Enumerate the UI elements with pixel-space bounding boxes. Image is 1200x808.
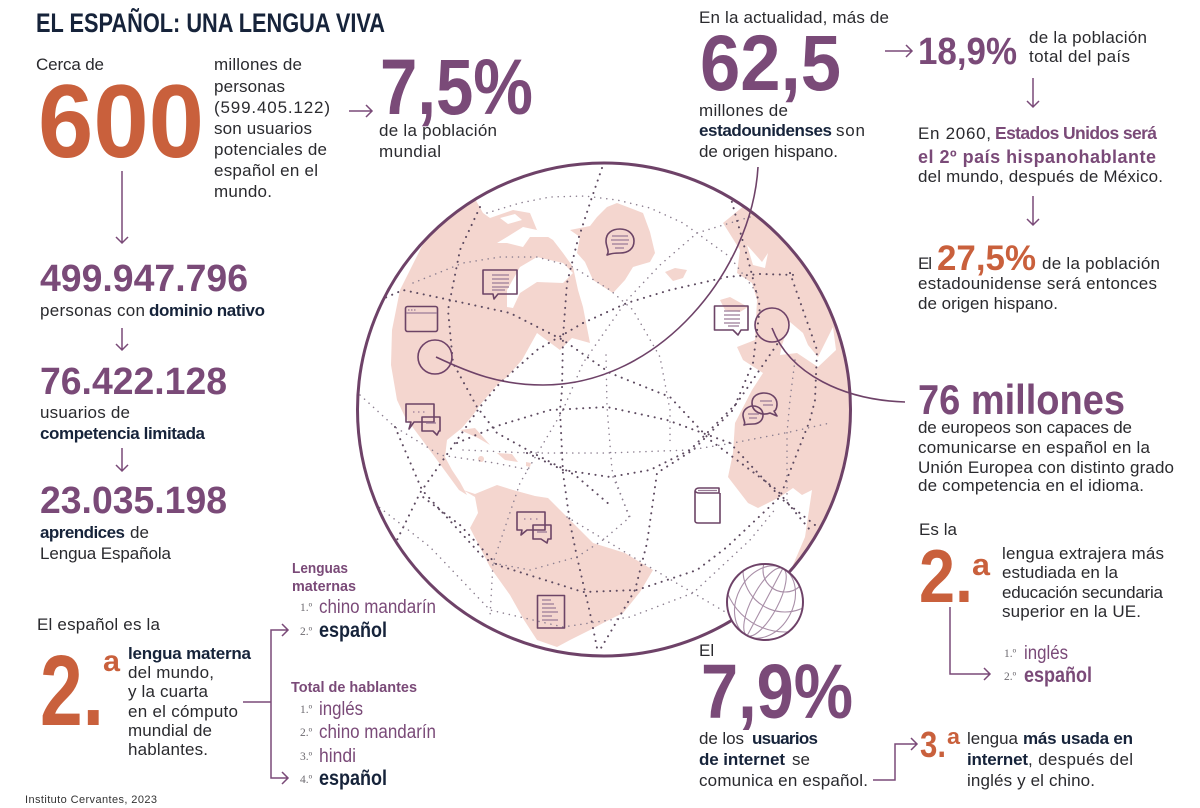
ranking: total speakers: 1.º xyxy=(300,704,313,716)
ranking: total speakers: chino mandarín xyxy=(319,722,436,743)
arc to Europe xyxy=(755,308,905,402)
stat: learners: de xyxy=(130,523,149,542)
stat: 27,5%: 27,5% xyxy=(937,239,1036,278)
stat: 27,5%: El xyxy=(918,254,932,273)
title: EL ESPAÑOL: UNA LENGUA VIVA xyxy=(36,7,385,38)
stat: third language on the internet: más usada en xyxy=(1023,729,1133,748)
arc to United States xyxy=(418,167,758,385)
stat: second mother tongue: y la cuarta xyxy=(128,682,209,701)
stat: 76 million Europeans: comunicarse en español en la xyxy=(918,438,1151,457)
stat: 62,5 million US hispanics: son xyxy=(836,121,865,140)
ranking: foreign languages: inglés xyxy=(1024,643,1068,664)
stat: 76 million Europeans: 76 millones xyxy=(918,376,1125,423)
stat: 76 million Europeans: de europeos son capaces de xyxy=(918,418,1132,437)
ranking: total speakers: 3.º xyxy=(300,751,313,763)
stat: 600 million users: personas xyxy=(214,77,285,96)
ranking: total speakers: 4.º xyxy=(300,774,313,786)
ranking: total speakers xyxy=(291,679,436,790)
stat: 7,9% internet users: El xyxy=(699,641,714,660)
stat: 7,5% xyxy=(379,42,533,161)
stat: learners xyxy=(40,480,227,563)
ranking: total speakers: 2.º xyxy=(300,727,313,739)
ranking: foreign languages: 1.º xyxy=(1004,648,1017,660)
stat: second foreign language: a xyxy=(972,547,991,582)
stat: second foreign language: superior en la UE. xyxy=(1002,602,1141,621)
icon: speech bubble near Britain xyxy=(714,306,748,335)
seas: Baltic and Mediterranean xyxy=(747,245,836,372)
stat: 18,9%: 18,9% xyxy=(918,31,1017,73)
elbow arrow xyxy=(873,738,917,780)
stat: native speakers: dominio nativo xyxy=(149,301,265,320)
land: Europe, Africa and Asia xyxy=(723,207,849,566)
stat: 27,5%: de la población xyxy=(1042,254,1160,273)
ranking: mother tongues: 2.º xyxy=(300,626,313,638)
stat: third language on the internet: , después del xyxy=(1028,750,1133,769)
ranking: mother tongues: español xyxy=(319,619,387,642)
stat: third language on the internet: inglés y el chino. xyxy=(967,771,1095,790)
stat: second mother tongue: 2. xyxy=(40,635,104,747)
stat: native speakers: personas con xyxy=(40,301,145,320)
map grid xyxy=(360,168,830,653)
stat: native speakers: 499.947.796 xyxy=(40,258,248,300)
stat: second foreign language: 2. xyxy=(919,534,973,618)
stat: limited competence: usuarios de xyxy=(40,403,130,422)
stat: third language on the internet: 3. xyxy=(920,724,946,765)
source: Instituto Cervantes, 2023 xyxy=(25,794,157,806)
stat: native speakers xyxy=(40,258,265,320)
stat: second mother tongue: del mundo, xyxy=(128,663,214,682)
stat: 600 million users: Cerca de xyxy=(36,55,104,74)
stat: 76 million Europeans: de competencia en el idioma. xyxy=(918,476,1144,495)
stat: 18,9%: total del país xyxy=(1029,47,1130,66)
land: Greenland xyxy=(570,203,655,293)
arrow down xyxy=(116,448,128,471)
stat: 600 million users: (599.405.122) xyxy=(214,98,330,117)
stat: 18,9% xyxy=(918,28,1147,73)
globe outline xyxy=(358,163,850,656)
stat: 600 million users xyxy=(36,55,330,201)
arrow down xyxy=(1027,196,1039,225)
arrow down xyxy=(116,328,128,350)
stat: learners: 23.035.198 xyxy=(40,480,227,522)
stat: 76 million Europeans: Unión Europea con distinto grado xyxy=(918,458,1174,477)
text: 2060 projection xyxy=(918,123,1163,186)
ranking: total speakers: hindi xyxy=(319,746,356,767)
stat: 600 million users: millones de xyxy=(214,55,302,74)
land: Britain xyxy=(720,297,748,312)
stat: limited competence: 76.422.128 xyxy=(40,361,227,403)
stat: 7,5%: 7,5% xyxy=(380,42,533,131)
stat: 7,5%: de la población xyxy=(379,121,497,140)
stat: second mother tongue: a xyxy=(103,645,120,678)
stat: 76 million Europeans xyxy=(918,376,1174,495)
icon: chat bubbles on Mexico xyxy=(406,404,440,435)
stat: second mother tongue: lengua materna xyxy=(128,644,252,663)
stat: 62,5 million US hispanics xyxy=(699,8,889,161)
stat: second foreign language: educación secundaria xyxy=(1002,583,1164,602)
arrow to 18,9% xyxy=(885,45,912,57)
ranking: mother tongues: chino mandarín xyxy=(319,597,436,618)
ranking: mother tongues xyxy=(292,560,436,642)
arrow to 7,5% xyxy=(349,105,372,117)
stat: 27,5% xyxy=(918,239,1160,313)
stat: 600 million users: potenciales de xyxy=(214,140,327,159)
stat: 600 million users: mundo. xyxy=(214,182,272,201)
stat: 600 million users: 600 xyxy=(38,64,204,180)
land: South America xyxy=(463,485,653,647)
stat: 600 million users: son usuarios xyxy=(214,119,312,138)
stat: second mother tongue: El español es la xyxy=(37,615,161,634)
stat: 7,9% internet users: comunica en español. xyxy=(699,771,868,790)
stat: 7,9% internet users xyxy=(699,641,868,790)
stat: 600 million users: español en el xyxy=(214,161,318,180)
text: 2060 projection: del mundo, después de México. xyxy=(918,167,1163,186)
stat: learners: aprendices xyxy=(40,523,125,542)
land: Arctic channels and Hudson Bay xyxy=(497,214,573,308)
ranking: mother tongues: Lenguas xyxy=(292,560,348,577)
ranking: mother tongues: maternas xyxy=(292,578,356,595)
stat: 18,9%: de la población xyxy=(1029,28,1147,47)
stat: second mother tongue: mundial de xyxy=(128,721,212,740)
stat: second foreign language xyxy=(919,520,1164,621)
ranking: mother tongues: 1.º xyxy=(300,602,313,614)
stat: 27,5%: de origen hispano. xyxy=(918,294,1058,313)
stat: third language on the internet: lengua xyxy=(967,729,1019,748)
globe map xyxy=(358,163,870,656)
stat: third language on the internet: internet xyxy=(967,750,1028,769)
icon: speech bubble over Canada xyxy=(483,270,517,299)
ranking: foreign languages: 2.º xyxy=(1004,671,1017,683)
icon: document xyxy=(538,596,564,628)
ranking: foreign languages xyxy=(1004,643,1092,687)
stat: third language on the internet: a xyxy=(947,724,961,749)
stat: 7,9% internet users: 7,9% xyxy=(701,649,853,735)
text: 2060 projection: En 2060, xyxy=(918,124,991,143)
icon: browser window xyxy=(406,306,438,332)
stat: 62,5 million US hispanics: En la actualidad, más de xyxy=(699,8,889,27)
text: 2060 projection: Estados Unidos será xyxy=(995,123,1157,143)
stat: 62,5 million US hispanics: millones de xyxy=(699,101,788,120)
stat: third language on the internet xyxy=(920,724,1133,790)
icon: book xyxy=(695,488,720,523)
ranking: total speakers: inglés xyxy=(319,699,363,720)
stat: second mother tongue: en el cómputo xyxy=(128,702,238,721)
bracket arrows xyxy=(243,624,288,784)
stat: second foreign language: lengua extrajera más xyxy=(1002,544,1164,563)
stat: second foreign language: estudiada en la xyxy=(1002,563,1119,582)
arrow down xyxy=(1027,78,1039,107)
stat: 7,5%: mundial xyxy=(379,142,441,161)
icon: oval chat bubbles on Africa xyxy=(743,393,777,425)
land: North and Central America xyxy=(391,190,590,495)
ranking: total speakers: español xyxy=(319,767,387,790)
text: 2060 projection: el 2º país hispanohablante xyxy=(918,147,1156,167)
stat: 7,9% internet users: se xyxy=(792,750,810,769)
stat: 7,9% internet users: usuarios xyxy=(752,729,818,748)
stat: 7,9% internet users: de internet xyxy=(699,750,785,769)
stat: second mother tongue: hablantes. xyxy=(128,740,208,759)
ranking: total speakers: Total de hablantes xyxy=(291,679,417,696)
stat: second mother tongue xyxy=(37,615,252,759)
stat: second foreign language: Es la xyxy=(919,520,958,539)
small globe icon xyxy=(726,563,804,641)
land: Caribbean islands xyxy=(460,428,531,467)
ranking: foreign languages: español xyxy=(1024,664,1092,687)
land: Iceland xyxy=(665,268,687,281)
elbow arrow xyxy=(950,607,990,680)
stat: limited competence: competencia limitada xyxy=(40,424,206,443)
stat: 7,9% internet users: de los xyxy=(699,729,744,748)
stat: limited competence xyxy=(40,361,227,443)
stat: 27,5%: estadounidense será entonces xyxy=(918,274,1157,293)
stat: 62,5 million US hispanics: estadounidenses xyxy=(699,121,832,140)
stat: learners: Lengua Española xyxy=(40,544,172,563)
icon: speech bubble on Greenland xyxy=(606,229,634,255)
stat: 62,5 million US hispanics: de origen hispano. xyxy=(699,142,838,161)
arrow down from 600 xyxy=(116,171,128,243)
icon: chat bubbles on South America xyxy=(517,512,551,543)
stat: 62,5 million US hispanics: 62,5 xyxy=(700,18,841,107)
